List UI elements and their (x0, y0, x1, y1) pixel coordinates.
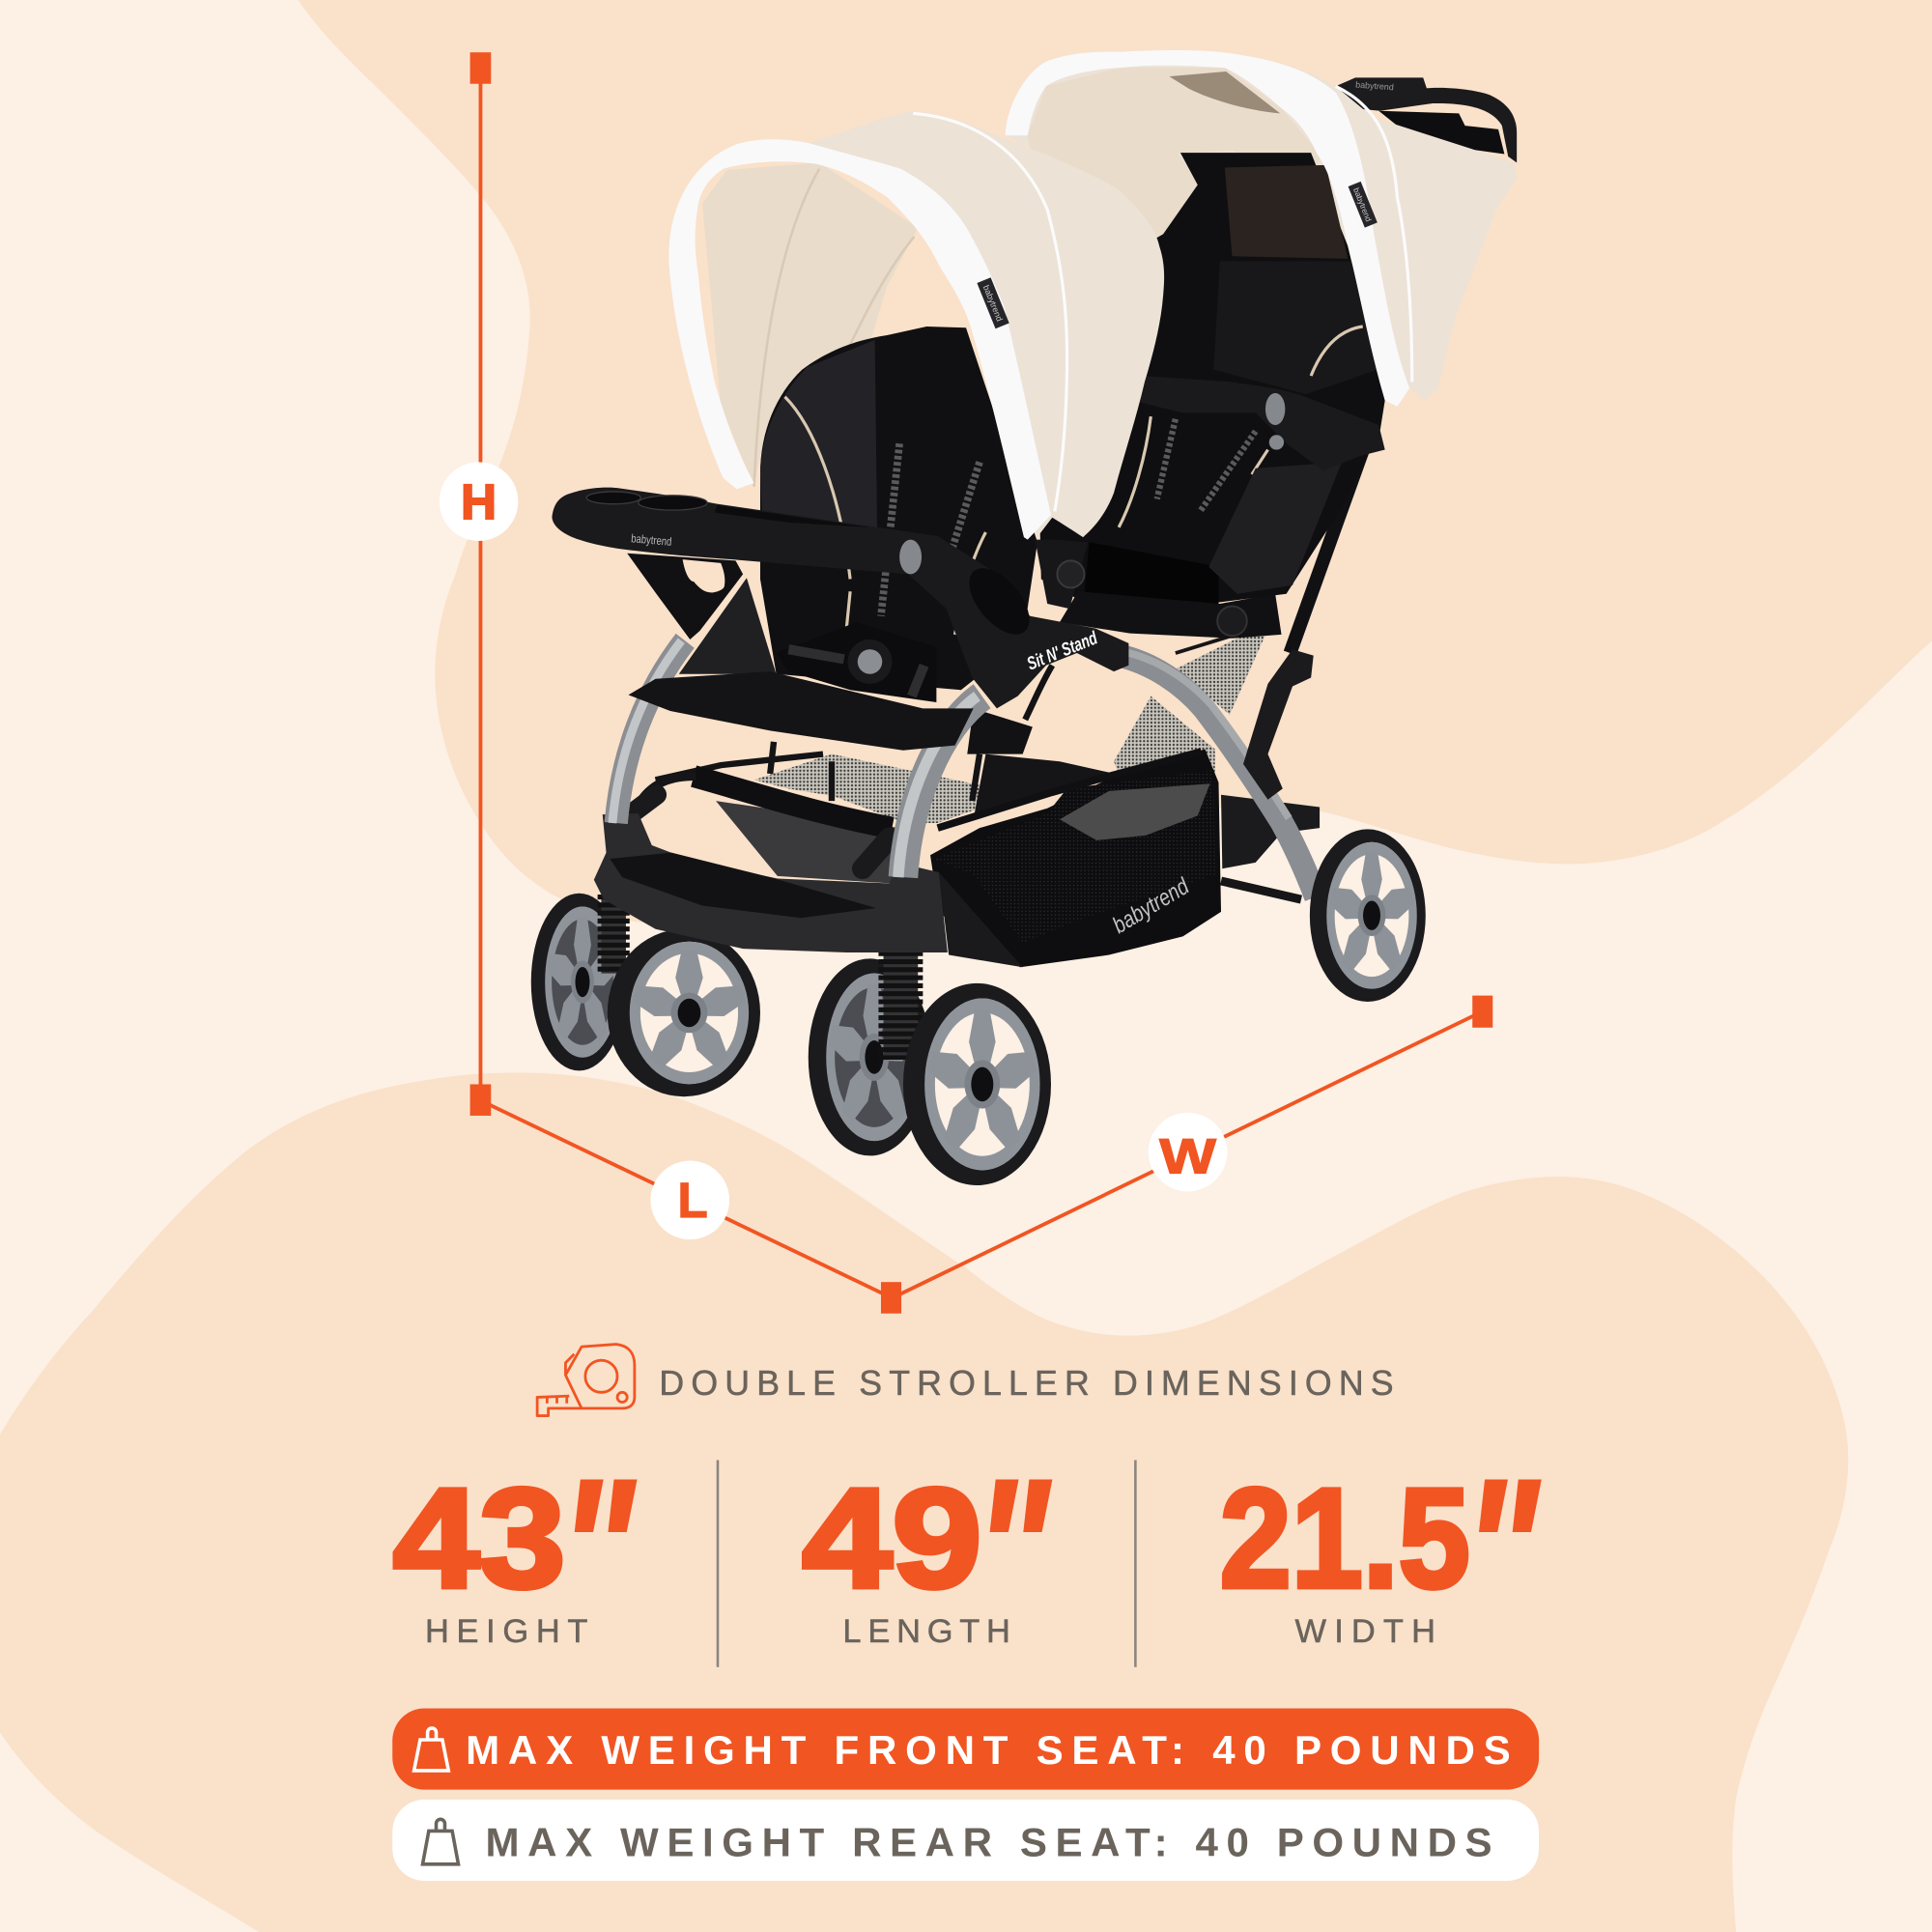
width dimension line (894, 996, 1492, 1297)
height dimension line (470, 52, 491, 1116)
rear tray (1132, 376, 1385, 470)
tray pivot (899, 540, 922, 574)
front seat piping (784, 397, 985, 666)
height stat (393, 1435, 637, 1663)
right silver tube (898, 696, 982, 877)
height inch mark: " (558, 1435, 637, 1663)
under-seat rack bar (656, 754, 823, 780)
rear handle: babytrend (1355, 80, 1394, 92)
big rear frame arc (1119, 652, 1316, 897)
front seat wing (760, 340, 877, 554)
front-left front wheel (608, 929, 760, 1096)
length stat (802, 1435, 1051, 1663)
under-bracket tube (1025, 666, 1052, 720)
bottom background blob (0, 1073, 1848, 1932)
rear upright frame (1290, 443, 1365, 653)
tray support arm (627, 554, 743, 639)
front tray with side bracket (552, 488, 1128, 708)
rear wheel (1310, 829, 1426, 1002)
L marker: L (678, 1173, 708, 1228)
rear seat weight pill (392, 1800, 1539, 1881)
front rack tube (640, 777, 696, 801)
width inch mark: " (1463, 1435, 1541, 1663)
rear seat back (1035, 153, 1385, 616)
front-left spring (604, 895, 623, 974)
footrest chassis (594, 813, 948, 952)
W marker (1149, 1113, 1227, 1191)
left silver tube (612, 640, 685, 823)
front seat side fabric (679, 578, 777, 674)
chassis side wedge (939, 872, 1023, 967)
front seat harness straps (881, 443, 980, 616)
harness buckle (777, 622, 936, 702)
divider (1134, 1460, 1137, 1667)
rear canopy interior (1028, 68, 1321, 321)
rear seat pad highlight (1213, 261, 1378, 394)
under-seat back mesh (754, 754, 997, 823)
front canopy interior (702, 162, 918, 487)
width stat (1220, 1435, 1541, 1663)
width label: WIDTH (1295, 1613, 1435, 1650)
height label: HEIGHT (425, 1613, 587, 1650)
rear seat text: MAX WEIGHT REAR SEAT: 40 POUNDS (486, 1820, 1492, 1865)
upper mesh bar (1176, 629, 1256, 653)
length dimension line (488, 1104, 901, 1314)
front canopy tag (977, 277, 1009, 328)
front canopy band (668, 139, 1051, 540)
L marker (650, 1161, 729, 1239)
rear axle bar (1221, 881, 1301, 899)
width value: 21.5 (1220, 1460, 1470, 1618)
length inch mark: " (974, 1435, 1051, 1663)
front-right front wheel (903, 983, 1051, 1185)
footrest step (610, 853, 876, 918)
upper mesh panel (1176, 621, 1271, 715)
front seat cushion (629, 671, 974, 751)
rear canopy piping (1336, 86, 1412, 382)
lower storage panel (716, 801, 899, 884)
front canopy seams (754, 169, 914, 487)
front canopy top (809, 111, 1164, 538)
stroller illustration (531, 50, 1517, 1185)
top background blob (298, 0, 1932, 924)
under-bracket fabric roll (967, 708, 1033, 754)
rear seat piping (1119, 327, 1363, 527)
rear canopy tag: babytrend (1351, 186, 1374, 223)
tray cup holders (586, 492, 870, 527)
H marker: H (461, 474, 497, 529)
rear lower bracket (1243, 649, 1314, 800)
sit n stand logo: Sit N' Stand (1024, 628, 1101, 675)
basket rim bar (938, 752, 1202, 828)
fabric roll bar (694, 777, 892, 828)
length label: LENGTH (842, 1613, 1010, 1650)
height value: 43 (393, 1460, 565, 1618)
storage basket (930, 750, 1221, 967)
rear seat bottom (1084, 542, 1218, 607)
front seat text: MAX WEIGHT FRONT SEAT: 40 POUNDS (466, 1727, 1511, 1773)
rear tray lower pivot (1269, 435, 1284, 450)
tray brand label: babytrend (631, 531, 672, 549)
rear canopy top (1006, 50, 1517, 407)
front seat back (760, 327, 1037, 690)
icon: tape measure (537, 1345, 635, 1416)
front canopy tag: babytrend (981, 284, 1005, 323)
icon: weight (423, 1819, 458, 1864)
front-left rear wheel (531, 894, 627, 1070)
section heading (537, 1345, 1394, 1416)
canopy hinge arm (1035, 540, 1088, 609)
bracket cup hole (958, 557, 1040, 645)
W marker: W (1159, 1128, 1217, 1183)
lower mesh panel (1114, 696, 1215, 828)
divider (717, 1460, 719, 1667)
front seat weight pill (392, 1708, 1539, 1790)
rear canopy band (1006, 50, 1409, 407)
basket brand label: babytrend (1108, 873, 1195, 939)
basket net panel (934, 770, 1215, 943)
rear tray pivot (1265, 393, 1285, 425)
length value: 49 (802, 1460, 982, 1618)
front canopy piping (913, 113, 1067, 511)
rear seat side panel (1208, 462, 1342, 594)
rear seat lower rail (1060, 591, 1282, 639)
rear seat harness straps (1157, 419, 1256, 511)
H marker (440, 462, 518, 541)
front-right rear wheel (809, 958, 931, 1155)
front-right spring (887, 952, 914, 1060)
rear canopy mesh vent (1169, 71, 1280, 113)
right brake knob (863, 838, 890, 868)
rear seat upper brown panel (1225, 165, 1348, 259)
rear handle (1336, 77, 1517, 162)
heading text: DOUBLE STROLLER DIMENSIONS (659, 1364, 1394, 1403)
basket top inner net (1060, 783, 1210, 840)
icon: weight (414, 1728, 448, 1771)
rear canopy tag (1349, 182, 1378, 228)
rear axle plate (1221, 795, 1320, 868)
left brake knob (632, 795, 657, 813)
under-seat poles (770, 742, 980, 801)
rear chassis board (974, 754, 1115, 819)
rear pivot (1217, 607, 1247, 636)
